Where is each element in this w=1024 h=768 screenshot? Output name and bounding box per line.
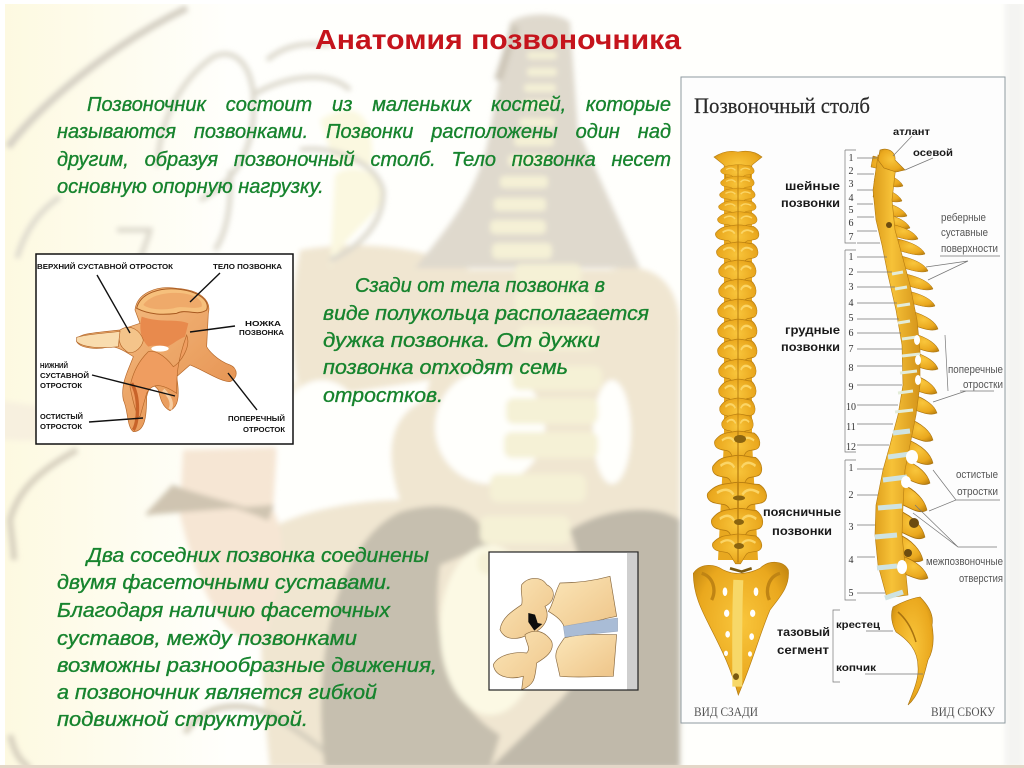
text block: vertebral arch: позвонка отходят семь <box>323 357 568 379</box>
panel: spinal column: ВИД СБОКУ <box>931 704 996 719</box>
title: Анатомия позвоночника <box>315 24 681 55</box>
text block: facet joints: суставов, между позвонками <box>57 628 357 650</box>
spine labels: сегмент <box>777 645 829 657</box>
text block: facet joints: подвижной структурой. <box>57 709 308 731</box>
spine labels: атлант <box>893 126 930 138</box>
vertebra numbers: 2 <box>848 166 854 177</box>
text block: vertebral arch: виде полукольца располагается <box>323 303 649 325</box>
diagram: single vertebra: ВЕРХНИЙ СУСТАВНОЙ ОТРОСТОК <box>37 262 173 271</box>
diagram: single vertebra: ОТРОСТОК <box>40 422 82 431</box>
vertebra numbers: 6 <box>848 218 854 229</box>
vertebra numbers: 7 <box>848 344 854 355</box>
diagram: single vertebra: НИЖНИЙ <box>40 361 68 370</box>
vertebra numbers: 4 <box>848 193 854 204</box>
spine: side view <box>871 149 939 705</box>
panel: spinal column: отростки <box>957 486 998 498</box>
diagram: single vertebra: ПОЗВОНКА <box>239 328 285 337</box>
spine labels: шейные <box>785 181 840 193</box>
vertebra numbers: 9 <box>848 382 854 393</box>
spine labels: копчик <box>836 662 877 674</box>
vertebra numbers <box>846 153 856 599</box>
vertebra numbers: 8 <box>848 363 854 374</box>
vertebra numbers: 3 <box>848 179 854 190</box>
spine labels: позвонки <box>772 526 832 538</box>
diagram: single vertebra: ОТРОСТОК <box>243 425 285 434</box>
panel: spinal column: суставные <box>941 227 988 239</box>
panel: spinal column: ВИД СЗАДИ <box>694 704 758 719</box>
diagram: single vertebra: ПОПЕРЕЧНЫЙ <box>228 414 285 423</box>
text block: spine intro: основную опорную нагрузку. <box>57 176 324 198</box>
vertebra numbers: 3 <box>848 282 854 293</box>
vertebra numbers: 1 <box>848 153 854 164</box>
text block: facet joints: возможны разнообразные движения, <box>57 655 437 677</box>
vertebra numbers: 10 <box>846 402 856 413</box>
panel: spinal column: поперечные <box>948 364 1003 376</box>
text block: facet joints <box>57 545 437 731</box>
panel: spinal column: поверхности <box>941 243 998 255</box>
diagram: single vertebra: СУСТАВНОЙ <box>40 371 89 380</box>
diagram: single vertebra: ТЕЛО ПОЗВОНКА <box>213 262 283 271</box>
diagram: single vertebra: ОТРОСТОК <box>40 381 82 390</box>
text block: facet joints: а позвоночник является гибкой <box>57 682 377 704</box>
spine labels: грудные <box>785 325 840 337</box>
diagram: single vertebra: ОСТИСТЫЙ <box>40 412 83 421</box>
vertebra numbers: 2 <box>848 267 854 278</box>
text block: vertebral arch: отростков. <box>323 385 443 407</box>
vertebra numbers: 7 <box>848 232 854 243</box>
spine labels: осевой <box>913 147 953 159</box>
panel: spinal column: отростки <box>963 379 1003 391</box>
vertebra numbers: 4 <box>848 298 854 309</box>
text block: vertebral arch: Сзади от тела позвонка в <box>355 275 605 297</box>
diagram: single vertebra <box>36 254 293 444</box>
text block: spine intro <box>57 94 671 198</box>
vertebra numbers: 6 <box>848 328 854 339</box>
vertebra numbers: 2 <box>848 490 854 501</box>
spine labels <box>763 126 953 674</box>
panel: spinal column: реберные <box>941 212 986 224</box>
vertebra numbers: 11 <box>846 422 856 433</box>
text block: spine intro: называются позвонками. Позвонки расположены один над <box>57 121 671 143</box>
text block: vertebral arch: дужка позвонка. От дужки <box>323 330 600 352</box>
vertebra numbers: 1 <box>848 252 854 263</box>
spine labels: крестец <box>836 619 881 631</box>
panel: spinal column: межпозвоночные <box>926 556 1003 568</box>
text block: spine intro: другим, образуя позвоночный столб. Тело позвонка несет <box>57 149 671 171</box>
diagram: facet joints between two vertebrae <box>489 552 638 690</box>
spine labels: поясничные <box>763 507 841 519</box>
text block: facet joints: Благодаря наличию фасеточных <box>57 600 391 622</box>
panel: spinal column <box>681 77 1005 723</box>
text block: spine intro: Позвоночник состоит из маленьких костей, которые <box>87 94 671 116</box>
diagram: single vertebra: НОЖКА <box>245 319 282 328</box>
panel: spinal column: отверстия <box>959 573 1003 585</box>
leader lines and brackets <box>833 136 1000 682</box>
text block: facet joints: Два соседних позвонка соединены <box>85 545 429 567</box>
vertebra numbers: 4 <box>848 555 854 566</box>
spine labels: тазовый <box>777 627 830 639</box>
vertebra numbers: 5 <box>848 313 854 324</box>
vertebra numbers: 3 <box>848 522 854 533</box>
text block: vertebral arch <box>323 275 649 407</box>
spine: back view <box>693 151 789 695</box>
vertebra numbers: 1 <box>848 463 854 474</box>
vertebra numbers: 12 <box>846 442 856 453</box>
text block: facet joints: двумя фасеточными суставами. <box>57 572 392 594</box>
panel heading: Позвоночный столб <box>694 93 870 118</box>
vertebra numbers: 5 <box>848 205 854 216</box>
spine labels: позвонки <box>781 198 840 210</box>
vertebra numbers: 5 <box>848 588 854 599</box>
spine labels: позвонки <box>781 342 840 354</box>
panel: spinal column: остистые <box>956 469 998 481</box>
